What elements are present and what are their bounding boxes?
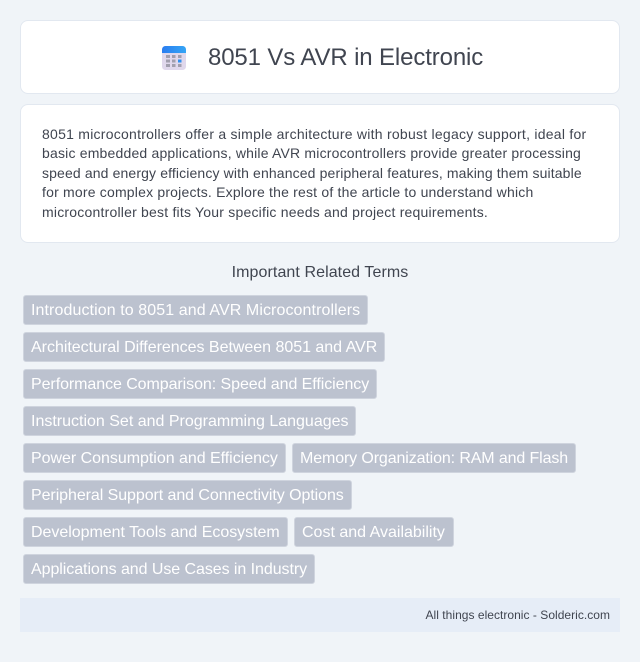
section heading: Important Related Terms	[232, 264, 408, 281]
term tags: Instruction Set and Programming Languages	[31, 413, 349, 430]
intro text panel: for more complex projects. Explore the rest of the article to understand which	[42, 184, 533, 200]
footer	[20, 598, 620, 632]
term tags	[23, 295, 576, 584]
title: 8051 Vs AVR in Electronic	[208, 44, 483, 71]
icon: calendar	[162, 46, 186, 70]
intro text panel	[20, 104, 620, 243]
footer: All things electronic - Solderic.com	[426, 608, 610, 622]
header panel	[20, 20, 620, 94]
intro text panel: speed and energy efficiency with enhanced peripheral features, making them suitable	[42, 165, 582, 181]
term tags: Introduction to 8051 and AVR Microcontrollers	[31, 302, 360, 319]
term tags: Performance Comparison: Speed and Efficiency	[31, 376, 369, 393]
term tags: Memory Organization: RAM and Flash	[300, 450, 568, 467]
intro text panel: 8051 microcontrollers offer a simple architecture with robust legacy support, ideal for	[42, 126, 586, 142]
intro text panel: microcontroller best fits Your specific needs and project requirements.	[42, 204, 488, 220]
term tags: Applications and Use Cases in Industry	[31, 561, 307, 578]
term tags: Development Tools and Ecosystem	[31, 524, 280, 541]
term tags: Power Consumption and Efficiency	[31, 450, 278, 467]
term tags: Peripheral Support and Connectivity Options	[31, 487, 344, 504]
term tags: Architectural Differences Between 8051 and AVR	[31, 339, 377, 356]
intro text panel: basic embedded applications, while AVR microcontrollers provide greater processing	[42, 145, 581, 161]
term tags: Cost and Availability	[302, 524, 445, 541]
